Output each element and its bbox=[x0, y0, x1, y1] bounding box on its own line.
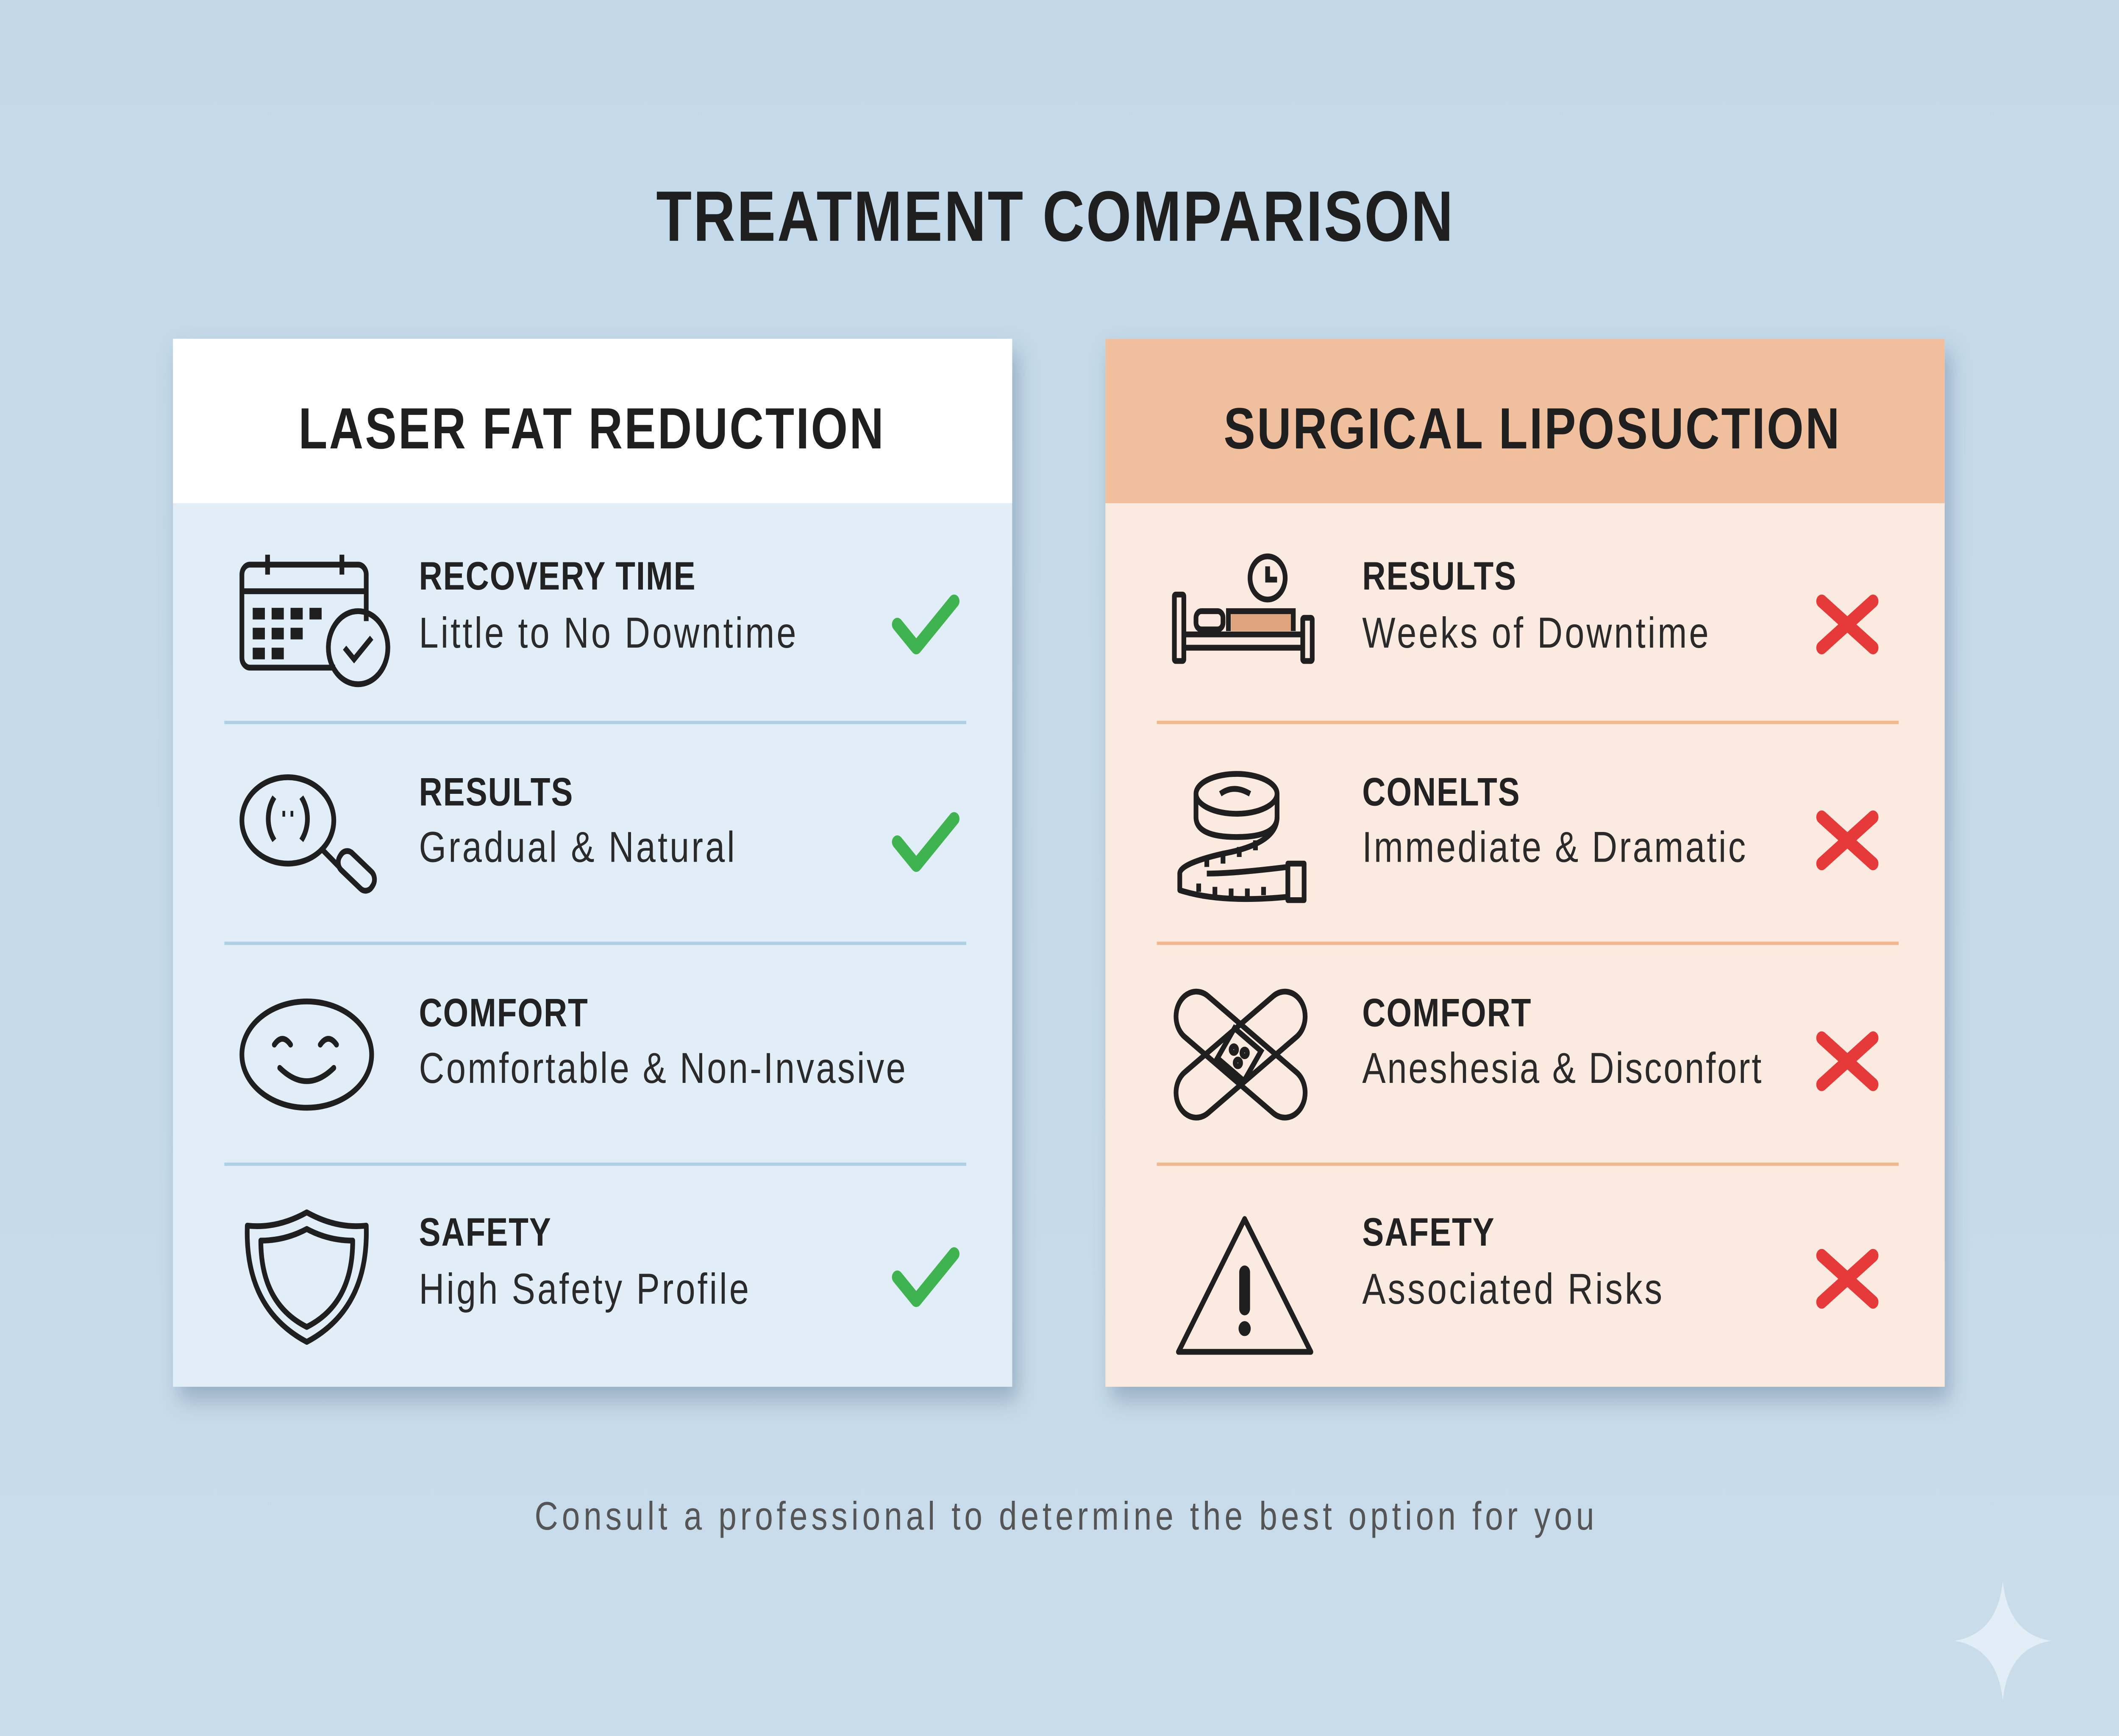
text: recovery bbox=[419, 554, 798, 657]
row: safety bbox=[247, 1210, 954, 1342]
row: results downtime bbox=[1174, 554, 1873, 661]
text: results bbox=[1362, 554, 1711, 657]
icon: measuring tape bbox=[1180, 774, 1304, 900]
text: comfort: Comfortable & Non-Invasive bbox=[419, 1044, 907, 1092]
header: laser: LASER FAT REDUCTION bbox=[298, 396, 885, 461]
icon: x bbox=[1821, 1255, 1873, 1302]
icon: check bbox=[897, 1254, 954, 1300]
icon: x bbox=[1821, 1038, 1873, 1085]
text: results: Weeks of Downtime bbox=[1362, 609, 1711, 657]
icon: check bbox=[897, 601, 954, 648]
text: safety: SAFETY bbox=[419, 1210, 552, 1255]
row: comfort bbox=[242, 990, 907, 1108]
text: results: RESULTS bbox=[419, 770, 573, 814]
row: safety bbox=[1179, 1210, 1873, 1352]
text: safety: SAFETY bbox=[1362, 1210, 1495, 1255]
title: TREATMENT COMPARISON bbox=[656, 176, 1455, 256]
icon: smiley bbox=[242, 1002, 372, 1108]
text: comfort: Aneshesia & Disconfort bbox=[1362, 1044, 1763, 1092]
icon: shield bbox=[247, 1212, 366, 1342]
text: comfort: COMFORT bbox=[1362, 990, 1532, 1035]
text: conelts: Immediate & Dramatic bbox=[1362, 823, 1748, 871]
header: surgical bbox=[1105, 339, 1945, 503]
text: safety bbox=[419, 1210, 751, 1313]
panel: surgical liposuction bbox=[1105, 339, 1945, 1387]
row: conelts bbox=[1180, 770, 1873, 900]
text: safety: High Safety Profile bbox=[419, 1265, 751, 1313]
row: recovery time bbox=[242, 554, 954, 684]
text: results bbox=[419, 770, 737, 871]
text: results: Gradual & Natural bbox=[419, 823, 737, 871]
text: conelts bbox=[1362, 770, 1748, 871]
icon: x bbox=[1821, 817, 1873, 864]
text: recovery: Little to No Downtime bbox=[419, 609, 798, 657]
header: laser bbox=[173, 339, 1012, 503]
icon: sparkle bbox=[1954, 1581, 2052, 1701]
text: comfort bbox=[419, 990, 907, 1092]
icon: warning bbox=[1179, 1219, 1311, 1352]
footer note: Consult a professional to determine the best option for you bbox=[535, 1494, 1598, 1538]
text: safety: Associated Risks bbox=[1362, 1265, 1664, 1313]
text: comfort bbox=[1362, 990, 1763, 1092]
row: results bbox=[242, 770, 954, 895]
text: recovery: RECOVERY TIME bbox=[419, 554, 696, 598]
text: comfort: COMFORT bbox=[419, 990, 589, 1035]
panel: laser fat reduction bbox=[173, 339, 1012, 1387]
icon: bandage bbox=[1168, 982, 1313, 1127]
text: conelts: CONELTS bbox=[1362, 770, 1521, 814]
row: comfort bbox=[1168, 982, 1873, 1127]
header: surgical: SURGICAL LIPOSUCTION bbox=[1224, 396, 1841, 461]
icon: check bbox=[897, 819, 954, 865]
text: results: RESULTS bbox=[1362, 554, 1517, 598]
text: safety bbox=[1362, 1210, 1664, 1313]
icon: magnifier body bbox=[242, 777, 378, 895]
icon: calendar bbox=[242, 555, 388, 684]
icon: bed with clock bbox=[1174, 556, 1312, 661]
icon: x bbox=[1821, 601, 1873, 648]
